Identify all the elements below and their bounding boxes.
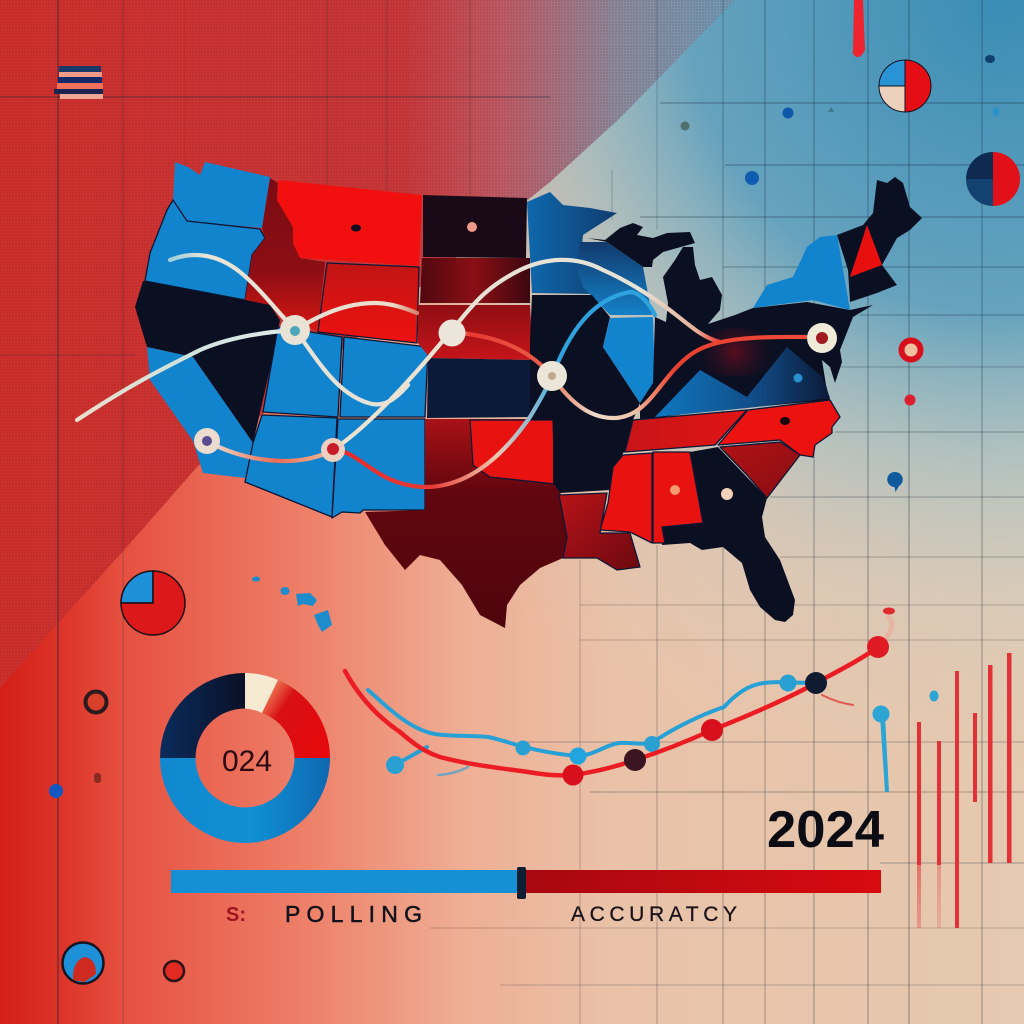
blue drip marker	[872, 690, 938, 792]
map of the United States	[135, 162, 922, 628]
scattered data points: right side	[883, 340, 920, 640]
curve node	[321, 438, 345, 462]
curve node	[280, 315, 310, 345]
label: S: S:	[226, 904, 246, 926]
state: Minnesota	[527, 192, 617, 294]
pie chart: right edge	[966, 152, 1020, 206]
donut center label: 024	[222, 745, 272, 778]
map state dots	[351, 222, 802, 500]
curve node	[537, 361, 567, 391]
year label: 2024	[767, 801, 884, 859]
state: New England	[837, 177, 922, 302]
icon: flag	[54, 66, 103, 99]
state: Washington	[173, 162, 270, 228]
state: Illinois	[603, 317, 655, 403]
state: Upper Michigan	[587, 223, 695, 267]
state: New Hampshire	[850, 225, 882, 277]
state: Georgia and Florida	[662, 447, 795, 622]
curve node	[194, 428, 220, 454]
progress bar	[171, 867, 881, 899]
state: Tennessee	[625, 410, 747, 452]
donut chart	[160, 673, 330, 843]
pie chart: top right	[879, 60, 931, 112]
state: Colorado	[340, 337, 428, 417]
red series	[345, 636, 889, 786]
state: Wyoming	[318, 263, 419, 343]
label: ACCURATCY: ACCURATCY	[571, 903, 737, 926]
halftone diagonal panel	[0, 0, 735, 688]
state: Oregon	[145, 200, 265, 300]
state: Nevada	[135, 281, 280, 443]
state: Texas	[365, 419, 567, 628]
state: Arizona	[245, 415, 337, 517]
state: South Carolina	[720, 442, 800, 498]
maroon shading over the Ohio Valley	[690, 328, 780, 376]
state: Kentucky and Virginia	[655, 347, 830, 417]
state: Missouri and Arkansas	[530, 295, 640, 493]
vertical red bar chart	[917, 653, 1012, 928]
curve node	[438, 320, 466, 346]
state: North Dakota	[423, 195, 527, 258]
state: Louisiana	[559, 493, 640, 570]
state: Oklahoma	[470, 420, 555, 484]
Hawaii islands	[252, 576, 332, 632]
blue series	[368, 674, 816, 775]
state: Nebraska	[418, 305, 533, 360]
label: POLLING: POLLING	[285, 901, 422, 927]
state: New Mexico	[332, 419, 425, 518]
pie chart: lower left	[121, 571, 185, 635]
state: Montana	[277, 180, 422, 266]
state: Idaho	[245, 178, 325, 332]
state: Utah	[263, 327, 342, 417]
icon: red drip	[853, 0, 865, 57]
state: South Dakota	[420, 258, 530, 303]
scattered markers: lower left	[49, 692, 184, 984]
line chart	[345, 636, 889, 786]
state: New York	[753, 235, 850, 310]
state: California	[147, 347, 253, 478]
state: Mississippi	[600, 453, 652, 543]
state: Wisconsin	[578, 242, 652, 315]
state: Kansas	[427, 358, 533, 418]
curve node	[807, 323, 837, 353]
scattered data points: upper right	[680, 55, 1000, 185]
state: Alabama	[653, 452, 703, 543]
state: Ohio Valley and Michigan	[640, 247, 873, 420]
state: North Carolina	[718, 400, 840, 457]
polling trend curves over the map	[77, 255, 837, 487]
